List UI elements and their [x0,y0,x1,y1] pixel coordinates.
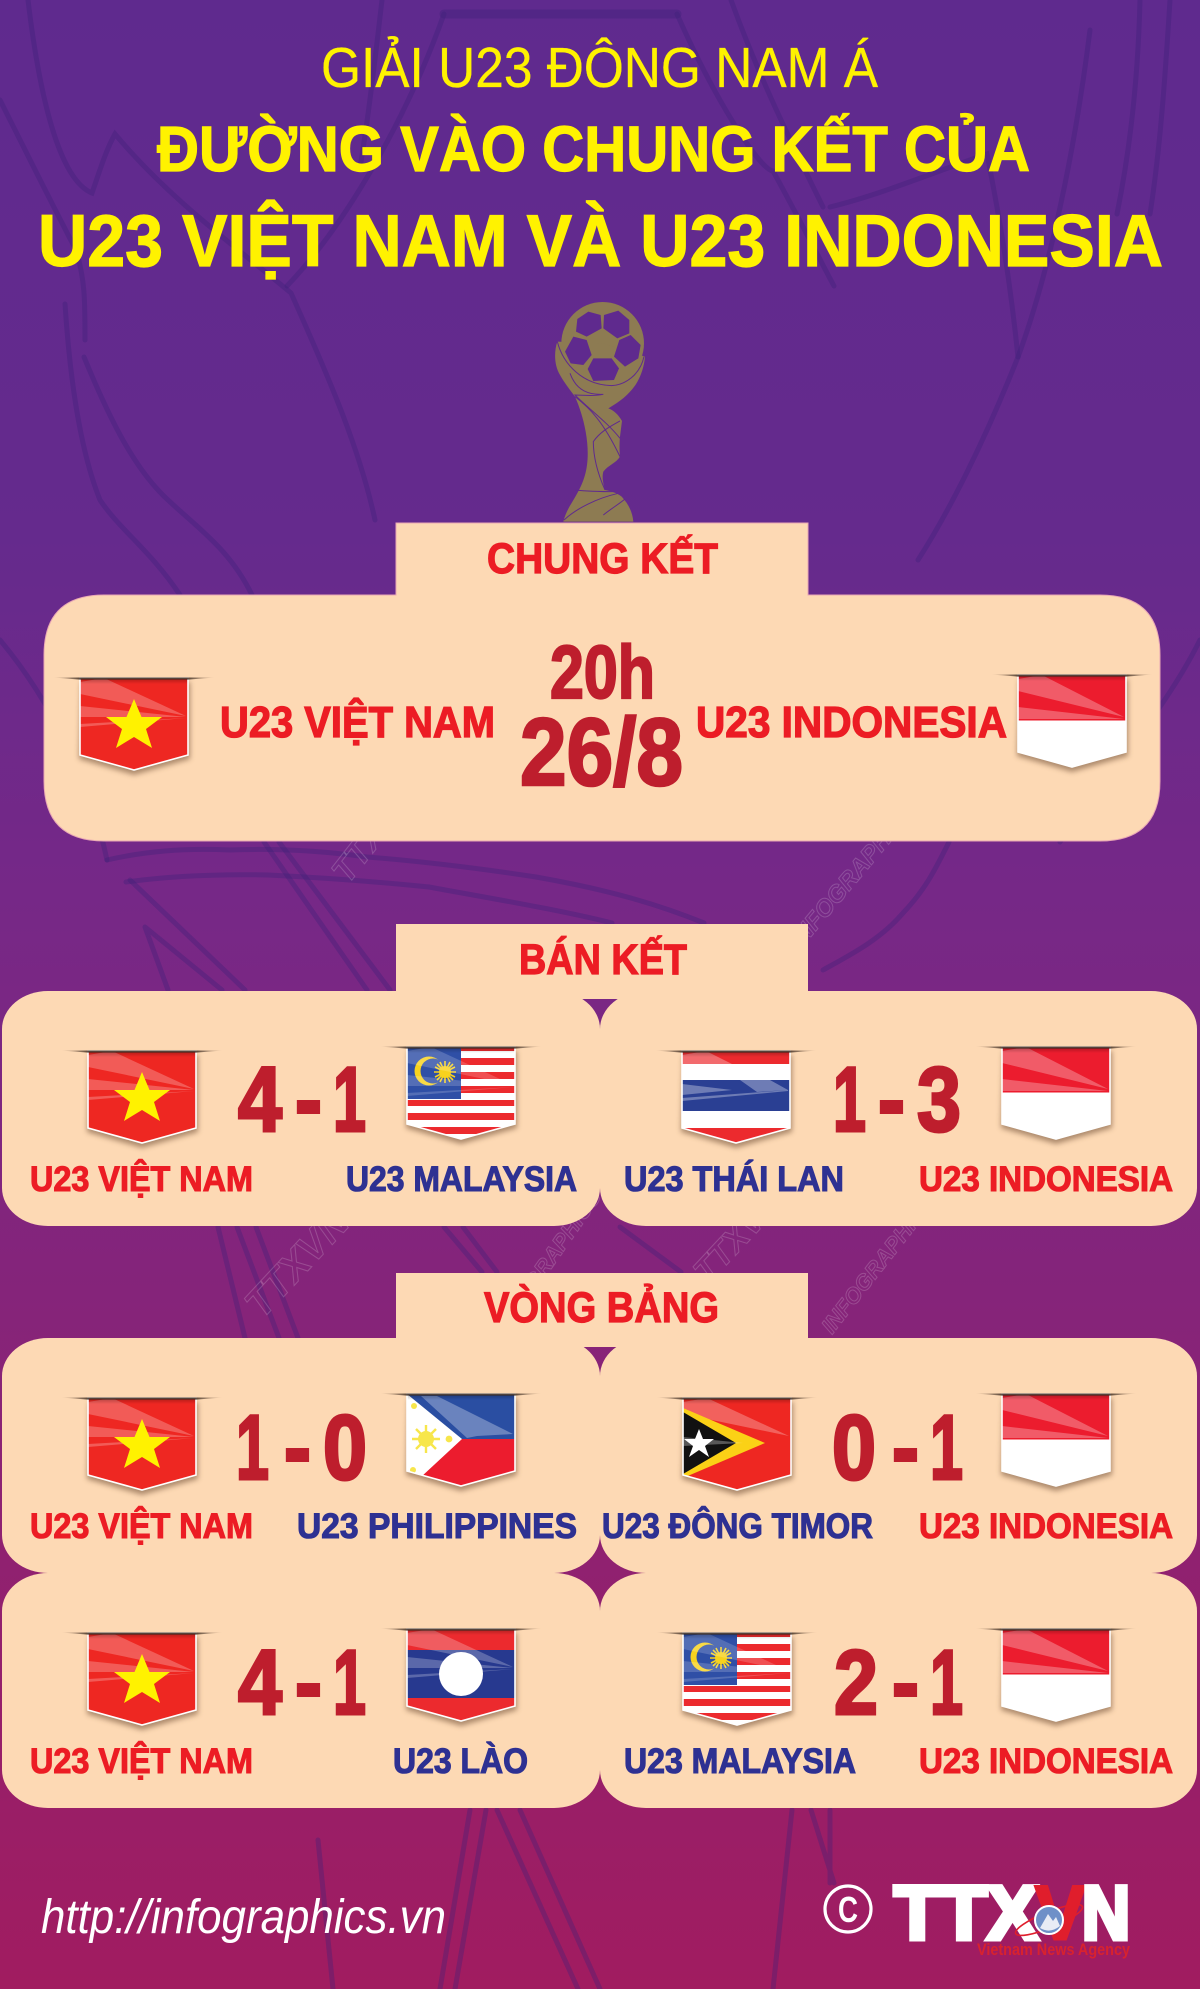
panel: group stage [2,1273,1197,1808]
match time: 20h [550,630,655,714]
match: Timor-Leste vs Indonesia: U23 ĐÔNG TIMOR [602,1506,873,1546]
match: Timor-Leste vs Indonesia: U23 INDONESIA [919,1507,1173,1546]
match: Vietnam vs Philippines: U23 VIỆT NAM [30,1506,253,1546]
heading: group stage: VÒNG BẢNG [484,1283,719,1332]
match: Thailand vs Indonesia: U23 INDONESIA [919,1160,1173,1199]
match: Timor-Leste vs Indonesia: 1 [930,1397,963,1499]
wordmark: TTX [894,1871,1038,1956]
logo: TTXVN: N [1082,1871,1130,1956]
match: Vietnam vs Malaysia: U23 VIỆT NAM [30,1159,253,1199]
globe [1013,1899,1085,1941]
panel: semi-finals [2,924,1197,1226]
match: Vietnam vs Malaysia: 4 [238,1049,282,1151]
copyright icon [825,1886,871,1932]
match: Vietnam vs Laos: U23 LÀO [393,1741,528,1781]
match: Vietnam vs Malaysia: - [295,1049,322,1151]
panel background: final [44,523,1160,841]
match: Vietnam vs Philippines: 0 [323,1397,367,1499]
match: Vietnam vs Philippines: - [284,1397,311,1499]
group card row 2 left [2,1573,600,1808]
match: Timor-Leste vs Indonesia [602,1394,1173,1546]
semi-final right card [600,991,1197,1226]
heading tab: group stage [396,1273,808,1347]
panel: final [44,523,1160,841]
match: Vietnam vs Philippines [30,1394,577,1546]
icon: trophy [555,302,645,522]
group card row 1 right [600,1338,1197,1573]
match: Vietnam vs Laos: - [295,1632,322,1734]
group card row 2 right [600,1573,1197,1808]
match: Vietnam vs Malaysia [30,1046,577,1199]
heading: final: CHUNG KẾT [487,535,718,583]
match: Thailand vs Indonesia: 3 [917,1049,961,1151]
title [38,35,1163,282]
match: Malaysia vs Indonesia: 1 [930,1632,963,1734]
watermarks: INFOGRAPHICS [784,796,923,954]
match date: 26/8 [520,699,683,806]
match: Vietnam vs Malaysia: 1 [333,1049,366,1151]
match: Malaysia vs Indonesia: U23 INDONESIA [919,1742,1173,1781]
match: Thailand vs Indonesia: - [878,1049,905,1151]
watermarks: TTXVN [686,1182,791,1290]
match: Vietnam vs Laos: 1 [333,1632,366,1734]
title: ĐƯỜNG VÀO CHUNG KẾT CỦA [157,112,1030,185]
watermarks: TTXVN [236,1199,359,1326]
logo: TTXVN: V [1035,1871,1085,1956]
match: Timor-Leste vs Indonesia: 0 [832,1397,876,1499]
agency name: Vietnam News Agency [977,1940,1130,1959]
match: Timor-Leste vs Indonesia: - [892,1397,919,1499]
flag: Indonesia [991,674,1153,772]
match: Vietnam vs Philippines: 1 [236,1397,269,1499]
footer url: http://infographics.vn [41,1891,446,1944]
label: Indonesia: U23 INDONESIA [696,698,1007,747]
watermarks [236,796,940,1338]
match: Malaysia vs Indonesia: 2 [834,1632,878,1734]
watermarks: INFOGRAPHICS [489,1185,606,1338]
heading: semi-finals: BÁN KẾT [519,936,687,984]
match: Vietnam vs Malaysia: U23 MALAYSIA [346,1160,577,1199]
label: Vietnam: U23 VIỆT NAM [220,697,495,747]
match: Thailand vs Indonesia [624,1046,1173,1199]
group card row 1 left [2,1338,600,1573]
match: Thailand vs Indonesia: 1 [833,1049,866,1151]
match: Vietnam vs Philippines: U23 PHILIPPINES [297,1507,577,1546]
match: Vietnam vs Laos: U23 VIỆT NAM [30,1741,253,1781]
logo: TTXVN [825,1871,1130,1959]
heading tab: semi-finals [396,924,808,999]
title: GIẢI U23 ĐÔNG NAM Á [321,35,878,100]
watermarks: INFOGRAPHICS [816,1190,940,1338]
watermarks: TTX [324,814,395,890]
semi-final left card [2,991,600,1226]
match: Malaysia vs Indonesia: U23 MALAYSIA [624,1742,856,1781]
copyright icon: C [838,1889,858,1930]
flag: Vietnam [53,678,215,775]
match: Thailand vs Indonesia: U23 THÁI LAN [624,1159,844,1199]
match: Vietnam vs Laos [30,1628,542,1781]
match: Vietnam vs Laos: 4 [238,1632,282,1734]
match: Malaysia vs Indonesia [624,1628,1173,1781]
match: Malaysia vs Indonesia: - [892,1632,919,1734]
